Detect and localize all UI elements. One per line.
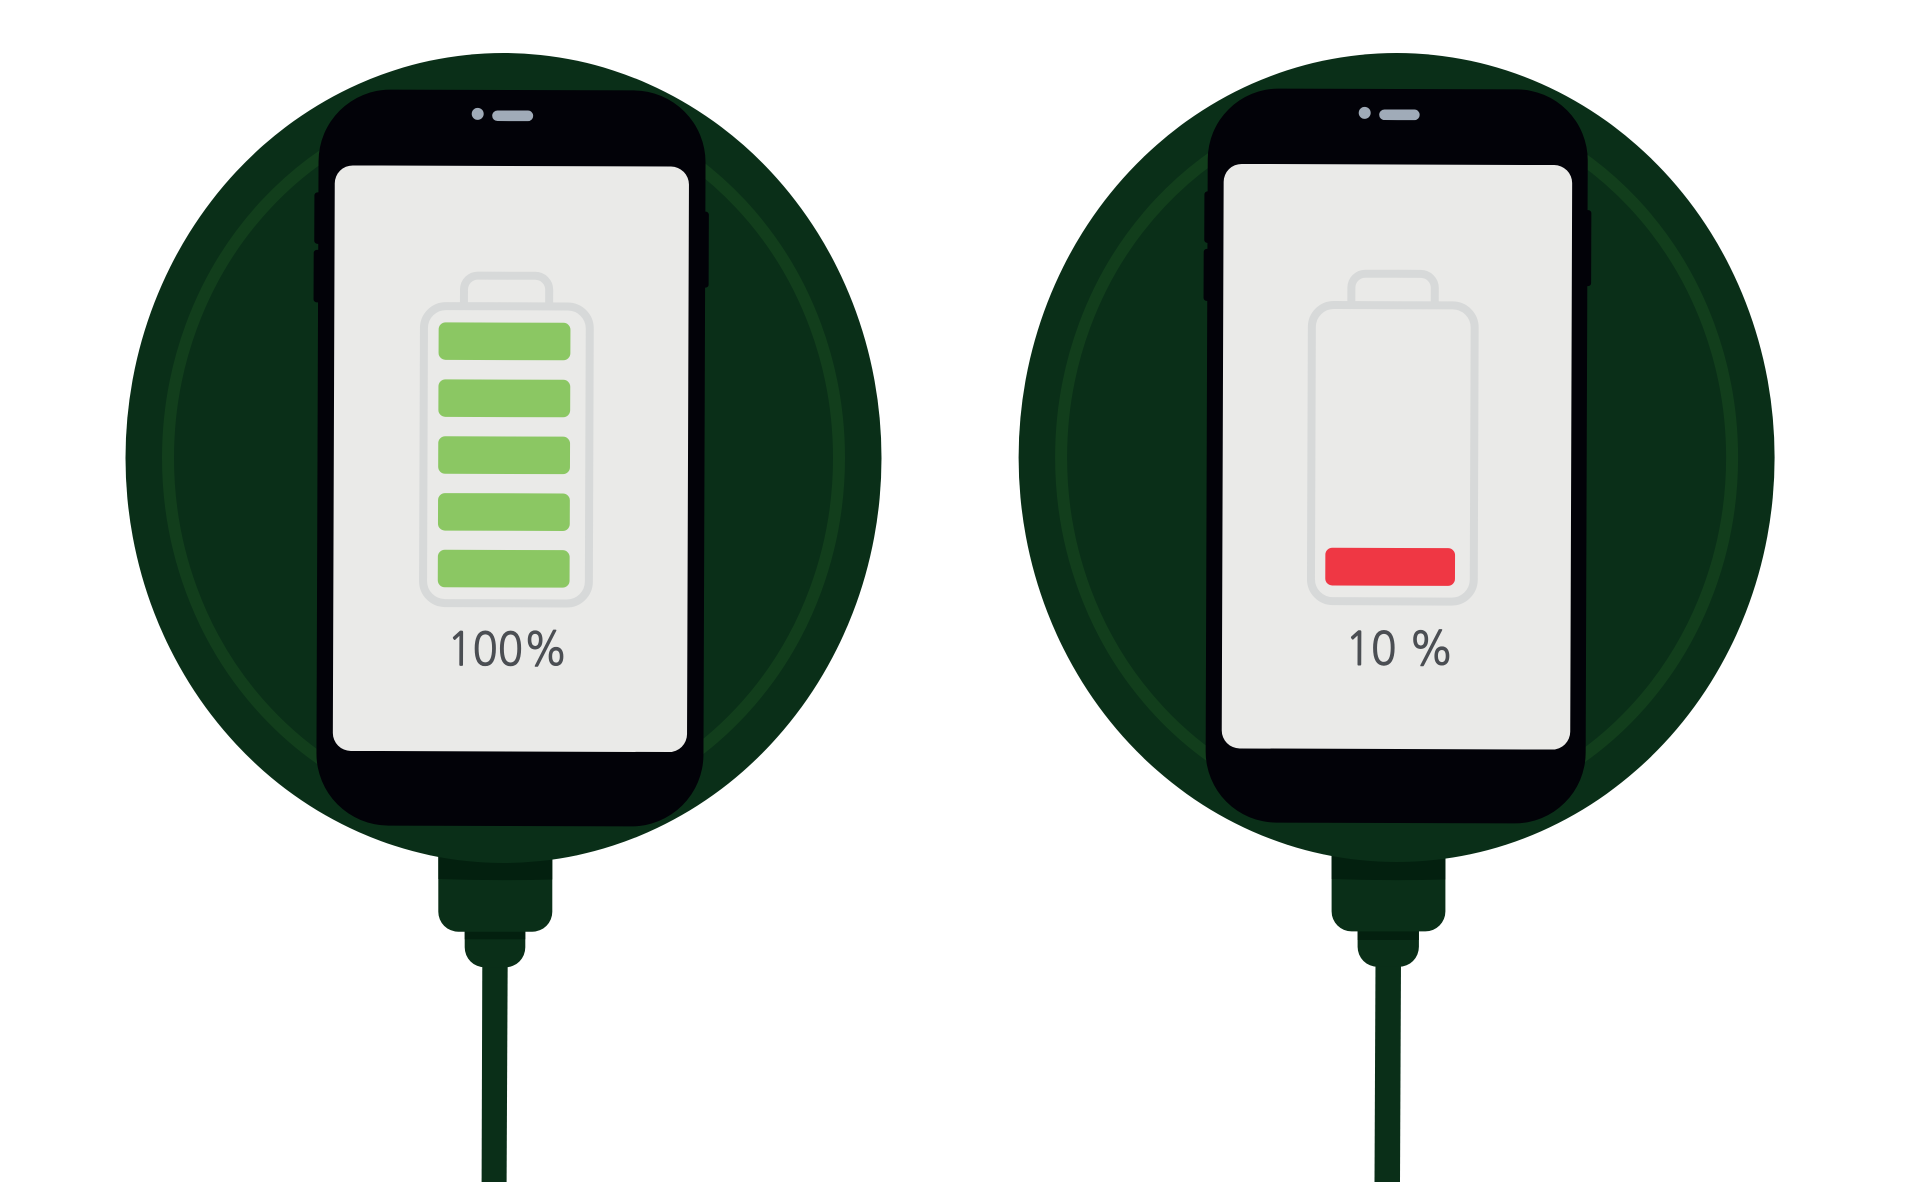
- icon: left wireless charging pad: [126, 53, 882, 863]
- label: 100%: 100%: [447, 626, 568, 673]
- panel: left charging phone, 100%: [126, 53, 882, 1182]
- icon: right front camera and speaker: [1359, 107, 1420, 120]
- left phone screen: [333, 165, 689, 752]
- icon: right charging cable: [1332, 850, 1445, 1182]
- icon: full battery outline: [423, 275, 590, 604]
- icon: right phone body and side buttons: [1202, 88, 1592, 824]
- icon: left charging cable: [438, 850, 552, 1182]
- icon: left front camera and speaker: [472, 108, 533, 121]
- icon: low battery outline: [1311, 274, 1475, 602]
- right phone screen: [1222, 164, 1572, 750]
- icon: left phone body and side buttons: [312, 89, 709, 827]
- battery level: five green bars: [438, 322, 570, 588]
- icon: right wireless charging pad: [1019, 53, 1775, 862]
- panel: right charging phone, 10%: [1019, 53, 1775, 1182]
- label: 10 %: 10 %: [1345, 626, 1454, 672]
- panel: right phone: [1202, 88, 1592, 824]
- battery level: one red bar: [1325, 548, 1455, 586]
- panel: left phone: [312, 89, 709, 827]
